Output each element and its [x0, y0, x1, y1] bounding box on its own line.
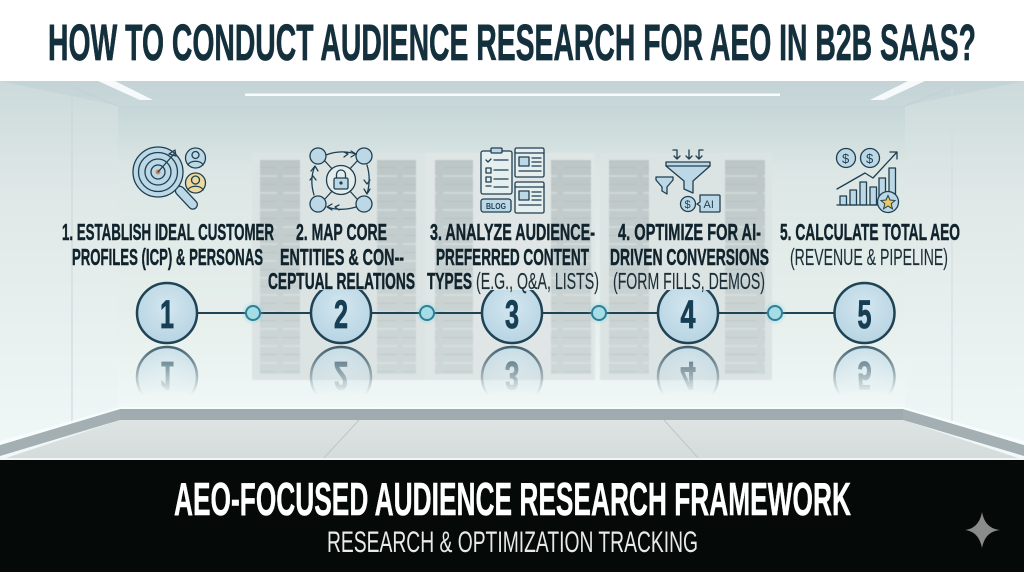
icon: revenue growth chart: $ [866, 151, 874, 166]
step 2 label [268, 219, 415, 294]
floor reflections of step circles: 3 [505, 353, 519, 397]
step circle 4: 4 [680, 293, 696, 337]
icon: target and personas [133, 147, 206, 211]
step circle 5: 5 [858, 293, 872, 337]
icon: conversion funnels: $ [684, 199, 691, 211]
step 3 label: TYPES [427, 268, 472, 294]
step circle 2 [311, 283, 371, 343]
step circle 4 [658, 283, 718, 343]
step circle 2: 2 [334, 293, 348, 337]
step 5 label [780, 219, 960, 270]
room background [0, 81, 1024, 460]
step 3 label [427, 219, 599, 294]
floor reflections of step circles: 2 [334, 353, 348, 397]
step 3 label: PREFERRED CONTENT [436, 244, 589, 270]
step 4 label [610, 219, 769, 294]
step circle 3 [482, 283, 542, 343]
floor reflections of step circles [136, 346, 896, 393]
step 2 label: 2. MAP CORE [296, 219, 387, 245]
icon: content types [481, 148, 544, 213]
icon: content types: BLOG [486, 201, 506, 211]
step 4 label: DRIVEN CONVERSIONS [610, 244, 769, 270]
icon: sparkle [965, 512, 1000, 548]
step 2 label: CEPTUAL RELATIONS [268, 268, 415, 294]
header band [0, 0, 1024, 81]
icon: revenue growth chart [836, 148, 898, 212]
floor reflections of step circles: 5 [858, 353, 872, 397]
step 1 label: PROFILES (ICP) & PERSONAS [72, 244, 263, 270]
floor reflections of step circles: 4 [680, 353, 696, 397]
server racks [252, 153, 772, 380]
step 1 label [62, 219, 274, 270]
footer subheading: RESEARCH & OPTIMIZATION TRACKING [327, 526, 698, 559]
footer band [0, 460, 1024, 572]
step 3 label: 3. ANALYZE AUDIENCE- [430, 219, 595, 245]
icon: entity map with lock [310, 148, 372, 212]
floor reflections of step circles: 1 [160, 353, 174, 397]
step 4 label: 4. OPTIMIZE FOR AI- [618, 219, 761, 245]
icon: conversion funnels [656, 150, 720, 212]
step 4 label: (FORM FILLS, DEMOS) [613, 268, 765, 294]
icon: conversion funnels: AI [704, 199, 714, 211]
step 1 label: 1. ESTABLISH IDEAL CUSTOMER [62, 219, 274, 245]
step circle 1: 1 [160, 293, 174, 337]
timeline connector [167, 301, 864, 325]
step circle 3: 3 [505, 293, 519, 337]
step 2 label: ENTITIES & CON-- [280, 244, 404, 270]
step 3 label: (E.G., Q&A, LISTS) [476, 268, 599, 294]
step circle 5 [834, 283, 894, 343]
step circle 1 [137, 283, 197, 343]
icon: revenue growth chart: $ [842, 151, 850, 166]
